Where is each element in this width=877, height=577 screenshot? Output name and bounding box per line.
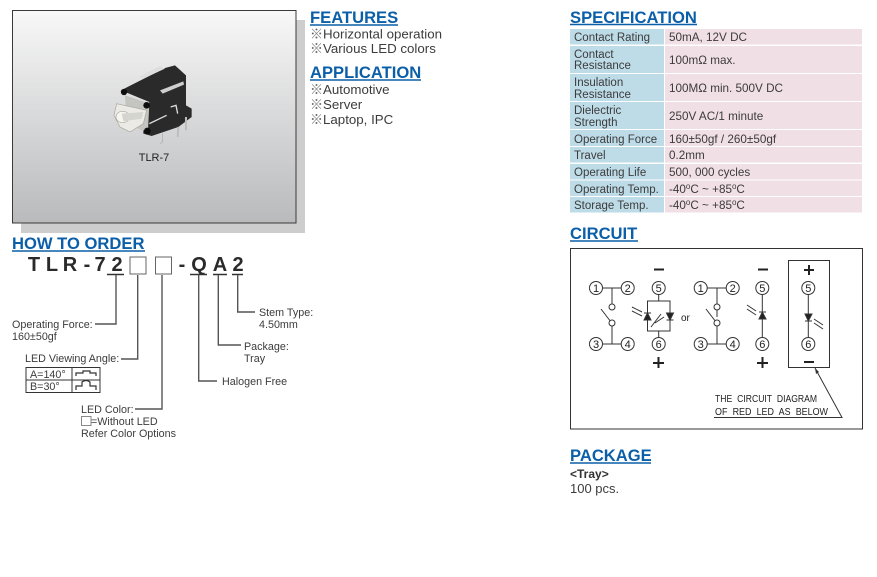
part number code: 2 (111, 254, 123, 276)
single LED schematic: 5 (759, 283, 765, 295)
specification table: Travel (574, 150, 606, 162)
specification table: Contact (574, 49, 614, 61)
part number code: - (179, 254, 185, 276)
product image: switch (114, 65, 192, 144)
callout arrow and note: THE CIRCUIT DIAGRAM (715, 394, 817, 405)
specification table: o (686, 182, 691, 191)
specification table: 250V AC/1 minute (669, 110, 763, 123)
specification table: -40 (669, 199, 686, 212)
specification table: C (736, 199, 745, 212)
specification table: 100MΩ min. 500V DC (669, 82, 783, 95)
left switch schematic: 2 (625, 283, 631, 295)
viewing angle table: A=140° (30, 369, 66, 381)
package details: <Tray> (570, 467, 609, 481)
package details (570, 467, 619, 496)
heading: features: FEATURES (310, 8, 398, 27)
specification table: C (736, 183, 745, 196)
features list: ※Various LED colors (310, 41, 436, 56)
specification table: -40 (669, 183, 686, 196)
circuit diagram (570, 248, 862, 429)
part number code: - (84, 254, 90, 276)
left switch schematic: 4 (625, 339, 631, 351)
specification table: o (686, 198, 691, 207)
application list: ※Server (310, 97, 363, 112)
specification table: Insulation (574, 77, 623, 89)
callout: operating force: 160±50gf (12, 331, 57, 343)
viewing angle table (26, 368, 100, 393)
part number code: T (28, 254, 40, 276)
application list: ※Automotive (310, 82, 390, 97)
callout: package (218, 275, 289, 365)
specification table: Operating Force (574, 134, 657, 146)
left switch schematic: 1 (593, 283, 599, 295)
single LED schematic (747, 270, 769, 368)
viewing angle table: B=30° (30, 381, 60, 393)
callout: LED color: =Without LED (91, 416, 158, 428)
part number code: 7 (94, 254, 106, 276)
callout: operating force (12, 275, 116, 343)
specification table: Dielectric (574, 105, 622, 117)
middle switch schematic: 4 (730, 339, 736, 351)
panel: product photo (12, 10, 305, 233)
middle switch schematic (694, 282, 739, 351)
specification table (570, 29, 862, 212)
left switch schematic (590, 282, 634, 351)
specification table: Contact Rating (574, 32, 650, 44)
callout: stem type: Stem Type: (259, 307, 313, 319)
red LED schematic: 5 (805, 283, 811, 295)
callout arrow and note (714, 368, 842, 418)
specification table: o (732, 182, 737, 191)
features list (310, 26, 442, 56)
specification table: Operating Life (574, 167, 646, 179)
heading: application: APPLICATION (310, 63, 421, 82)
callout: LED color: Refer Color Options (81, 428, 176, 440)
features list: ※Horizontal operation (310, 26, 442, 42)
callout: operating force: Operating Force: (12, 319, 93, 331)
red LED schematic (788, 260, 830, 368)
red LED schematic: 6 (805, 339, 811, 351)
callout: stem type (238, 275, 313, 331)
specification table: Storage Temp. (574, 200, 649, 212)
part number code: 2 (232, 254, 244, 276)
specification table: Resistance (574, 89, 631, 101)
callout: LED viewing angle (25, 275, 138, 393)
heading: how to order: HOW TO ORDER (12, 234, 144, 253)
specification table: 0.2mm (669, 149, 705, 162)
middle switch schematic: 2 (730, 283, 736, 295)
callout: LED viewing angle: LED Viewing Angle: (25, 353, 119, 365)
part number code: R (63, 254, 78, 276)
specification table: C ~ +85 (690, 183, 732, 196)
heading: specification: SPECIFICATION (570, 8, 697, 27)
heading: circuit: CIRCUIT (570, 224, 637, 243)
specification table: Resistance (574, 60, 631, 72)
callout: LED color: LED Color: (81, 404, 134, 416)
specification table: 160±50gf / 260±50gf (669, 133, 777, 146)
product label: TLR-7 (139, 152, 169, 164)
specification table: Strength (574, 117, 617, 129)
part number code: A (213, 254, 227, 276)
specification table: Operating Temp. (574, 184, 659, 196)
callout: package: Package: (244, 341, 289, 353)
application list: ※Laptop, IPC (310, 112, 394, 127)
callout: halogen free (199, 275, 287, 388)
application list (310, 82, 394, 127)
part number code: L (46, 254, 58, 276)
part number code: Q (191, 254, 207, 276)
heading: package: PACKAGE (570, 446, 652, 465)
specification table: 500, 000 cycles (669, 166, 750, 179)
specification table: C ~ +85 (690, 199, 732, 212)
callout: halogen free: Halogen Free (222, 376, 287, 388)
callout arrow and note: OF RED LED AS BELOW (715, 407, 828, 418)
dual LED schematic: 5 (656, 283, 662, 295)
single LED schematic: 6 (759, 339, 765, 351)
middle switch schematic: 1 (698, 283, 704, 295)
dual LED schematic: 6 (656, 339, 662, 351)
dual LED schematic (632, 270, 674, 368)
specification table: 100mΩ max. (669, 54, 736, 67)
part number code (28, 254, 244, 276)
specification table: o (732, 198, 737, 207)
specification table: 50mA, 12V DC (669, 31, 747, 44)
package details: 100 pcs. (570, 481, 619, 496)
callout: LED color (81, 275, 176, 440)
middle switch schematic: 3 (698, 339, 704, 351)
callout: package: Tray (244, 353, 266, 365)
label: or: or (681, 313, 691, 324)
left switch schematic: 3 (593, 339, 599, 351)
callout: stem type: 4.50mm (259, 319, 298, 331)
